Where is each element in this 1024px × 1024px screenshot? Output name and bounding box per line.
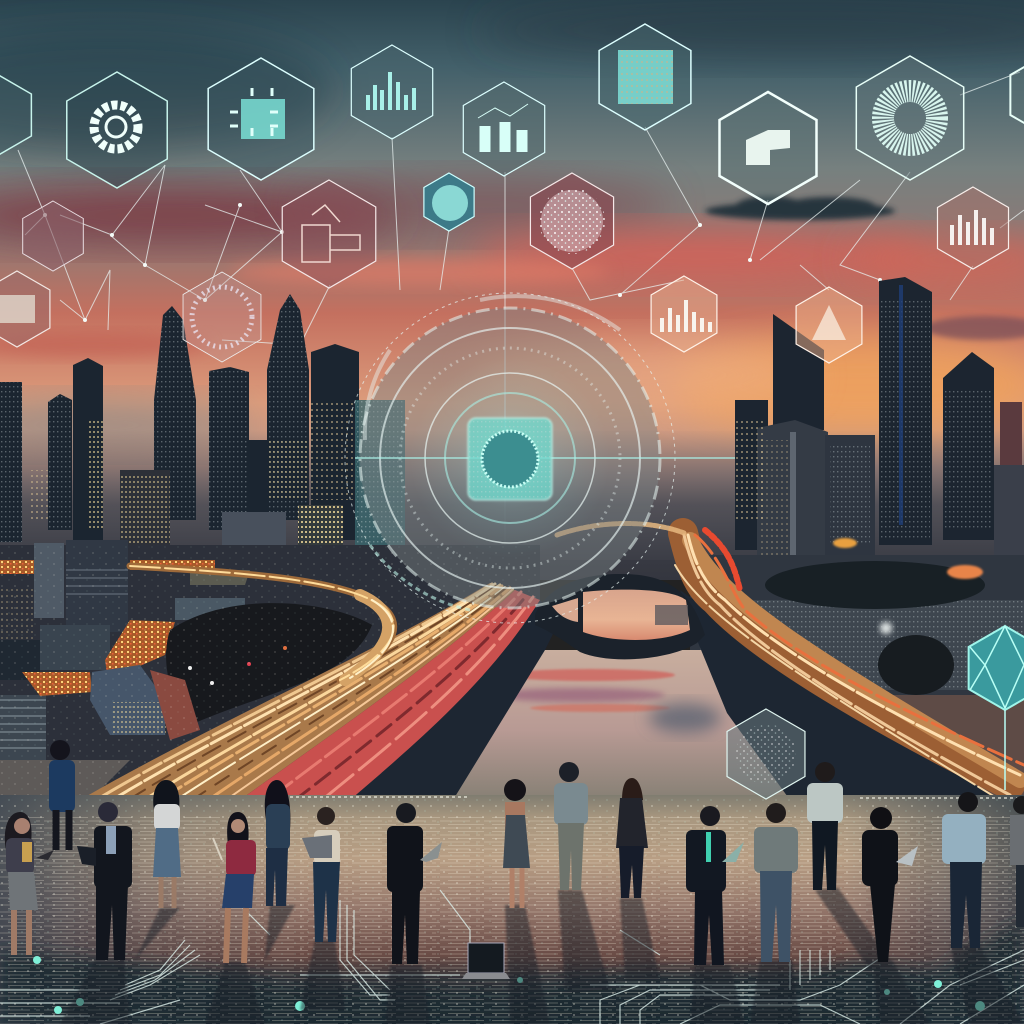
hexagon: orange bars [651, 276, 717, 352]
gold lane [80, 583, 515, 800]
hexagon: small teal orb [424, 173, 474, 231]
hexagon: faint left [23, 201, 83, 271]
towers [735, 277, 1024, 570]
ground platform [0, 795, 1024, 1024]
rings [345, 293, 675, 623]
person 17: woman navy far back [49, 740, 75, 850]
hexagon: white shapes [720, 92, 816, 204]
red lane [240, 590, 540, 800]
hexagon: radial orb [856, 56, 964, 180]
hexagon: right bars [937, 187, 1009, 269]
hexagon: wireframe left [183, 272, 261, 362]
ground grid texture [0, 815, 1024, 1024]
ground light dots [0, 797, 1024, 1024]
lower city right [690, 538, 1024, 800]
hexagon: building left [0, 271, 50, 347]
person 3: woman blue dress [153, 780, 181, 908]
river under bridge [360, 650, 830, 810]
person 5: woman dark teal [265, 780, 290, 906]
hexagon: lower right orb [727, 709, 805, 799]
hexagon: pink orb [530, 173, 614, 269]
haze disc [360, 308, 660, 608]
person 1: woman gray skirt [5, 812, 54, 955]
hexagon: gear [67, 72, 167, 188]
right light-trail road [557, 523, 1024, 800]
mid rooftops [90, 665, 165, 735]
people shadows [60, 888, 1024, 1024]
network nodes [43, 203, 882, 347]
hexagon: triangle [796, 287, 862, 363]
circuit board traces [0, 890, 1024, 1024]
person 14: woman black suit [862, 807, 918, 962]
left skyline [0, 294, 405, 572]
lower city left [0, 540, 540, 800]
central chip [468, 418, 552, 500]
person 9: man gray shirt [554, 762, 588, 890]
hexagon: blueprint [282, 180, 376, 288]
hexagon: far left gear fragment [0, 73, 31, 157]
water reflections [495, 669, 721, 733]
person 12: man gray shirt jeans [754, 803, 798, 962]
upper left curving road [130, 566, 394, 680]
person 11: man suit teal tie [686, 806, 744, 965]
person 2: man black suit [77, 802, 132, 960]
sky background [0, 0, 1024, 560]
lit windows [30, 400, 405, 572]
hexagon: right teal gem [969, 626, 1024, 790]
circuit nodes [33, 956, 985, 1014]
person 7: man black suit with laptop [387, 803, 442, 964]
central hologram [345, 293, 735, 623]
person 6: woman white top [302, 807, 340, 942]
streaks [96, 584, 533, 800]
person 4: woman red top [213, 812, 256, 963]
laptop on ground [462, 943, 510, 979]
ground side shading [0, 795, 1024, 1024]
person 16: man at right edge [1010, 796, 1024, 927]
bridge pillars [350, 590, 1000, 800]
tower silhouettes [0, 294, 359, 542]
sunset clouds [0, 0, 1024, 450]
person 13: man white shirt [807, 762, 843, 890]
right skyline [735, 277, 1024, 570]
horizon dotted line [290, 797, 1024, 798]
sky seen through arch [552, 590, 690, 640]
person 10: woman dark top [616, 778, 648, 898]
hexagon: teal grid [599, 24, 691, 130]
network connection lines [18, 72, 1024, 600]
distant city haze [0, 430, 1024, 580]
hexagon: bars [351, 45, 433, 139]
windows and highlights [736, 285, 991, 567]
hexagon: bar chart [463, 82, 545, 176]
dark park [166, 603, 372, 725]
dark circuit floor [0, 920, 1024, 1024]
bridge arch [535, 574, 705, 659]
bottom left street [0, 760, 130, 800]
dark cloud [705, 196, 895, 220]
tower window texture [0, 294, 309, 542]
orange lit platforms [22, 672, 92, 696]
left light-trail road [80, 583, 540, 800]
person 8: woman dark dress [503, 779, 530, 908]
person 15: man blue shirt [942, 792, 986, 948]
hexagon: far right [1010, 55, 1024, 135]
hexagon: chip [208, 58, 314, 180]
